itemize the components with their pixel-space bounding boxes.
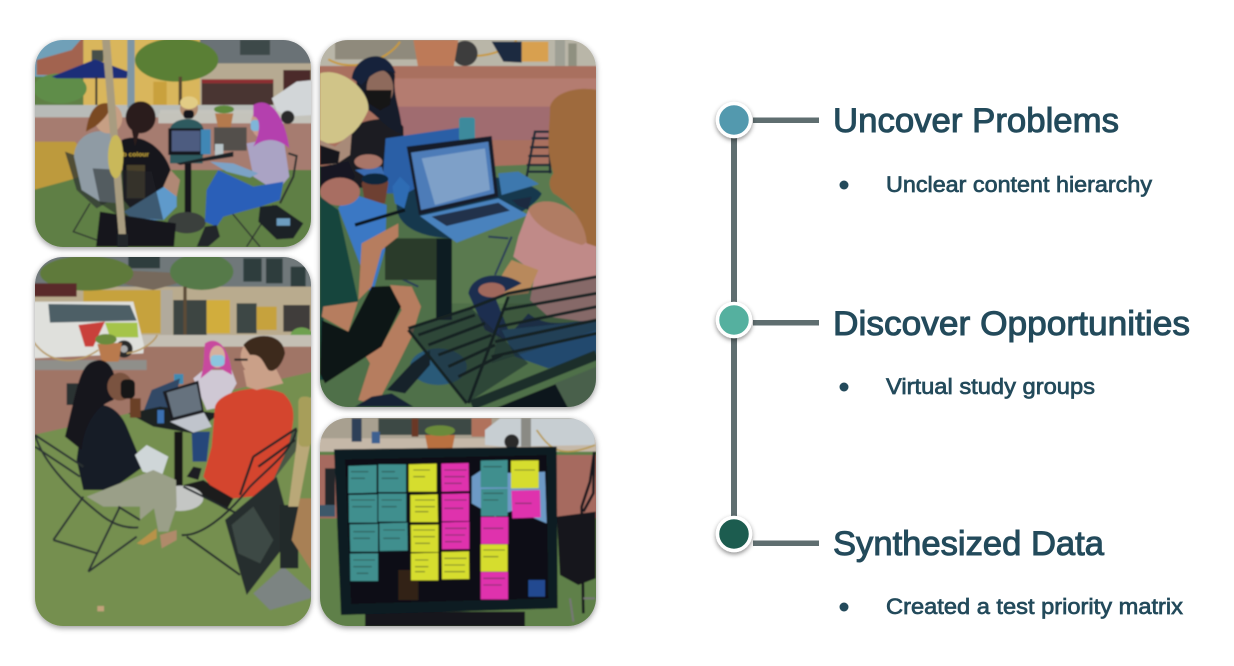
woman right — [513, 201, 597, 323]
chair back — [527, 132, 552, 177]
step 2: discover opportunities — [718, 304, 1190, 399]
red shirt man — [203, 389, 293, 498]
girl back-left — [330, 118, 404, 188]
bullet 2 — [840, 382, 848, 392]
chairs back — [214, 127, 247, 151]
notebook — [338, 193, 387, 297]
photo: team testing outdoors at table: b colour — [123, 152, 149, 159]
chair front — [408, 308, 528, 403]
sign board — [225, 477, 287, 595]
node 1 — [718, 104, 750, 136]
finding 1: Unclear content hierarchy — [886, 172, 1152, 197]
chair front left — [35, 435, 140, 572]
table — [128, 407, 220, 433]
laptop main — [407, 136, 498, 215]
heading 3: Synthesized Data — [833, 525, 1104, 563]
finding 3: Created a test priority matrix — [886, 594, 1183, 619]
photo: close-up of laptop with test session — [318, 38, 598, 408]
blue laptop behind — [382, 127, 462, 193]
pole — [102, 39, 126, 235]
heading 1: Uncover Problems — [833, 102, 1119, 140]
table — [397, 177, 542, 238]
person back — [170, 119, 203, 163]
step 3: synthesized data — [718, 518, 1183, 619]
laptop main — [162, 380, 204, 412]
dark sitter — [77, 405, 143, 490]
connector 2 — [753, 320, 819, 326]
bag — [557, 512, 596, 585]
board frame — [334, 447, 558, 615]
person middle — [122, 138, 171, 212]
node 3 — [718, 518, 750, 550]
person left — [74, 131, 120, 203]
node 2 — [718, 304, 750, 336]
heading 2: Discover Opportunities — [833, 305, 1190, 343]
laptop — [168, 128, 203, 155]
chair back right — [183, 480, 233, 510]
connector 1 — [753, 118, 819, 123]
finding 2: Virtual study groups — [886, 374, 1095, 399]
step 1: uncover problems — [718, 102, 1152, 197]
photo: glass board with sticky notes — [318, 417, 598, 630]
bullet 3 — [840, 602, 848, 612]
table — [177, 152, 233, 165]
photo: team around laptop with red shirt — [33, 253, 313, 630]
person right — [246, 139, 290, 186]
timeline vertical line — [731, 120, 737, 536]
pink hair person — [193, 370, 237, 410]
laptop behind — [143, 378, 180, 413]
person green shirt — [320, 197, 358, 380]
photo: team testing outdoors at table — [33, 37, 313, 250]
connector 3 — [753, 540, 819, 546]
bullet 1 — [840, 180, 848, 190]
blond person — [320, 72, 368, 143]
sticky notes — [348, 460, 508, 581]
